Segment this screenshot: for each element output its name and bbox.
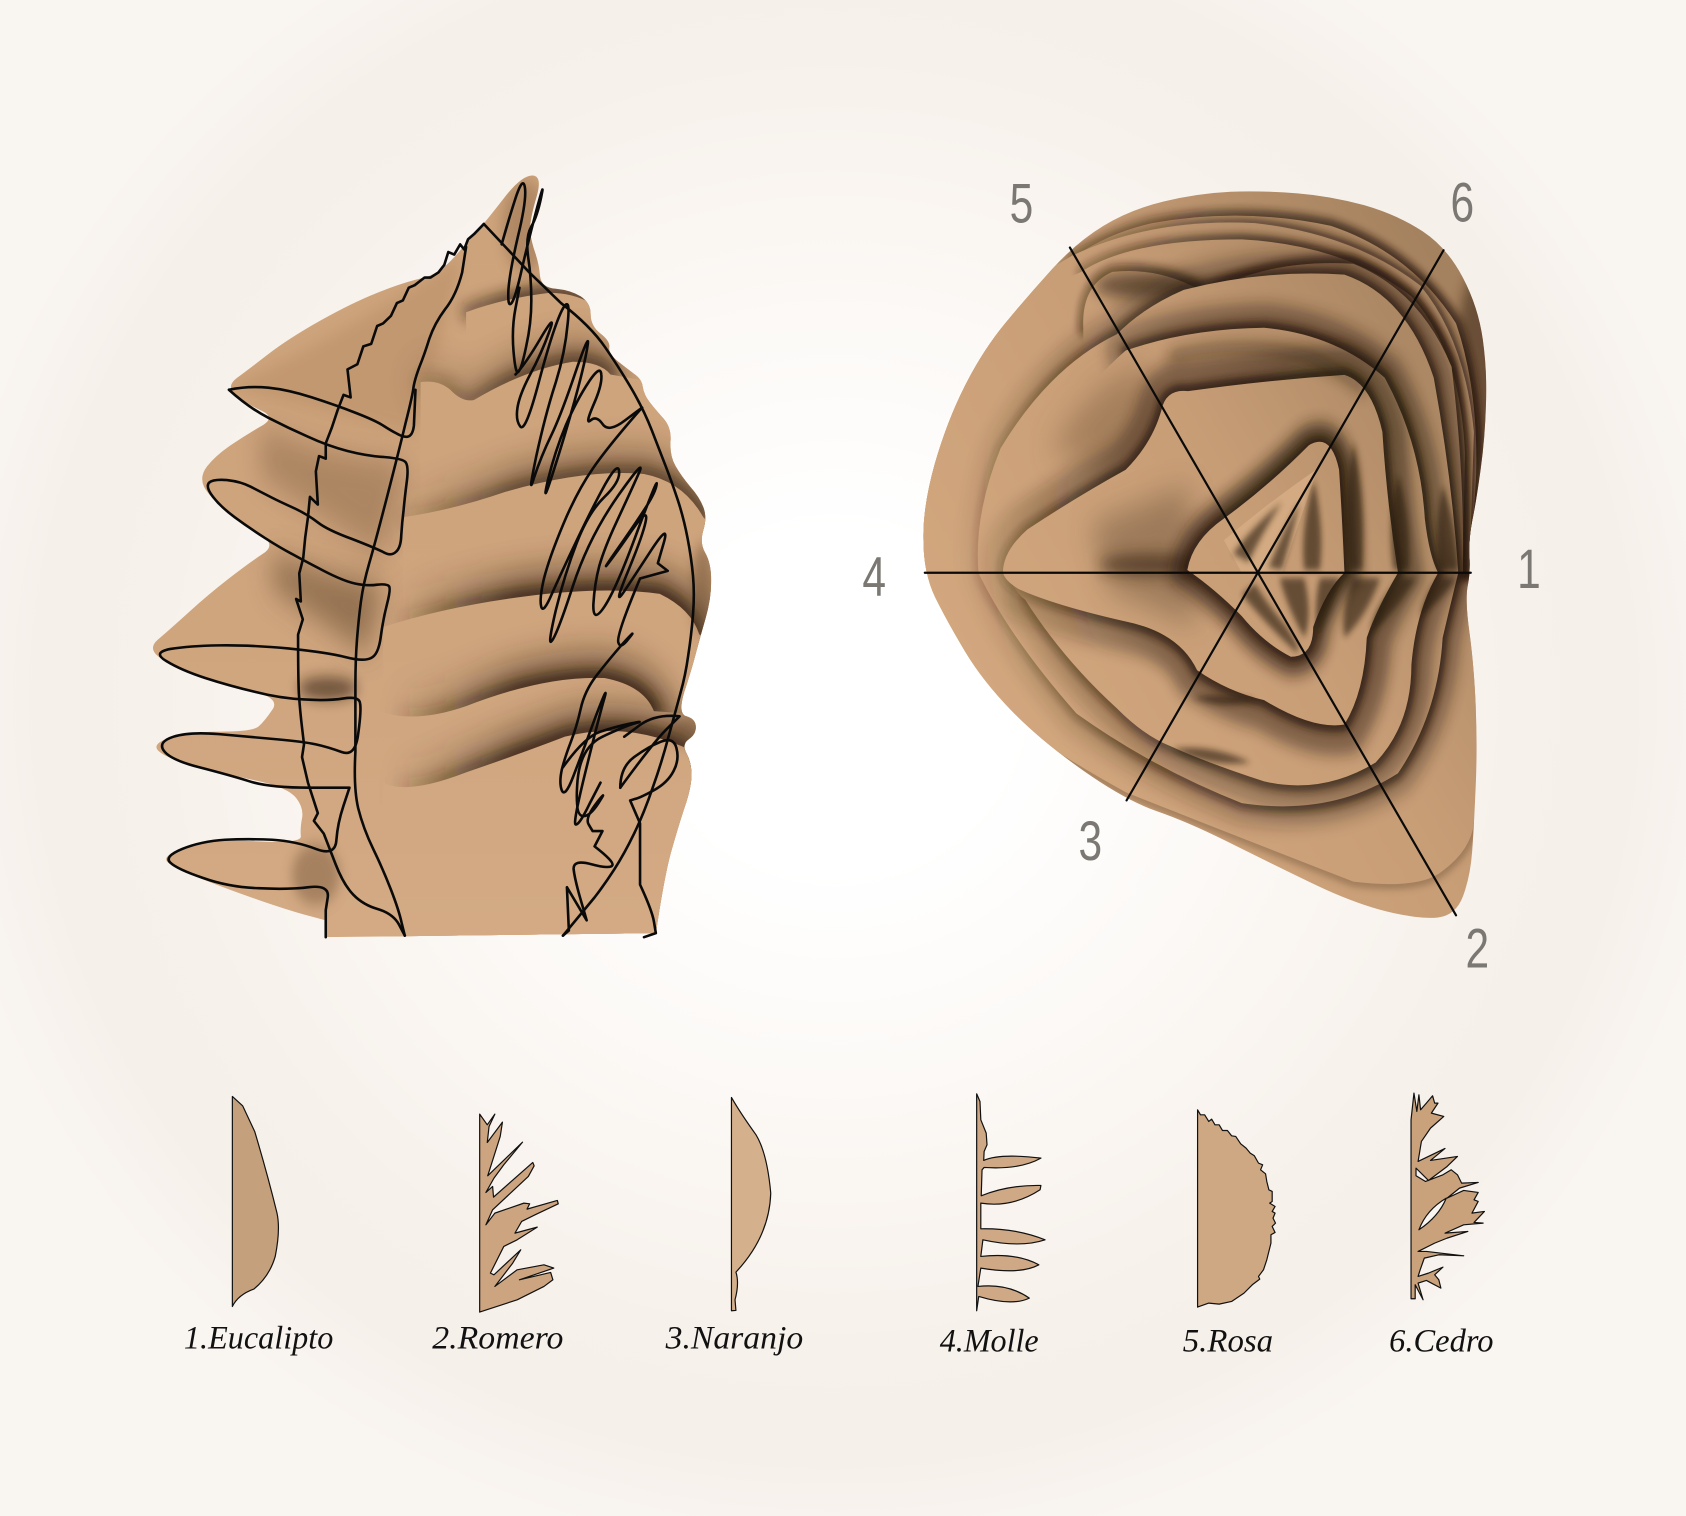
leaf outline: right margin — [484, 224, 694, 936]
leaf: Molle — [977, 1094, 1045, 1311]
caption 2: 2.Romero — [432, 1319, 563, 1355]
leaf: Naranjo — [731, 1097, 771, 1311]
scribble: middle right — [541, 408, 668, 825]
caption 4: 4.Molle — [940, 1322, 1039, 1358]
scribble: bottom right loop — [620, 716, 680, 937]
scribble: lower right — [563, 722, 640, 936]
scribble: top loops — [502, 183, 543, 372]
leaf outline: jagged left margin — [296, 224, 484, 936]
number 3: 3 — [1078, 809, 1102, 873]
folded surface — [923, 191, 1486, 918]
axis numbers — [862, 171, 1541, 980]
leaf: Cedro — [1411, 1093, 1484, 1300]
caption 3: 3.Naranjo — [665, 1319, 803, 1355]
leaf: Romero — [480, 1114, 558, 1312]
leaf outline: spine — [355, 247, 466, 936]
caption 5: 5.Rosa — [1183, 1322, 1273, 1358]
leaf: Rosa — [1198, 1110, 1276, 1307]
infographic: leaf forms — [153, 176, 1539, 1356]
number 2: 2 — [1466, 917, 1489, 980]
axis line 3 to 6 — [1127, 250, 1444, 800]
caption 1: 1.Eucalipto — [184, 1319, 333, 1355]
axis line 4 to 1 — [925, 572, 1471, 574]
leaf outline: left lobes — [160, 387, 415, 937]
number 1: 1 — [1517, 537, 1541, 601]
number 5: 5 — [1010, 172, 1033, 235]
3D folded surface — [153, 176, 712, 937]
number 4: 4 — [862, 545, 886, 608]
number 6: 6 — [1450, 171, 1474, 234]
leaf: Eucalipto — [232, 1096, 278, 1306]
caption row — [184, 1319, 1493, 1358]
axis line 5 to 2 — [1070, 248, 1456, 915]
caption 6: 6.Cedro — [1389, 1322, 1493, 1358]
scribble: upper right — [516, 304, 642, 493]
panel: top view of folded form — [923, 191, 1486, 918]
panel: side view of folded form — [153, 176, 712, 938]
